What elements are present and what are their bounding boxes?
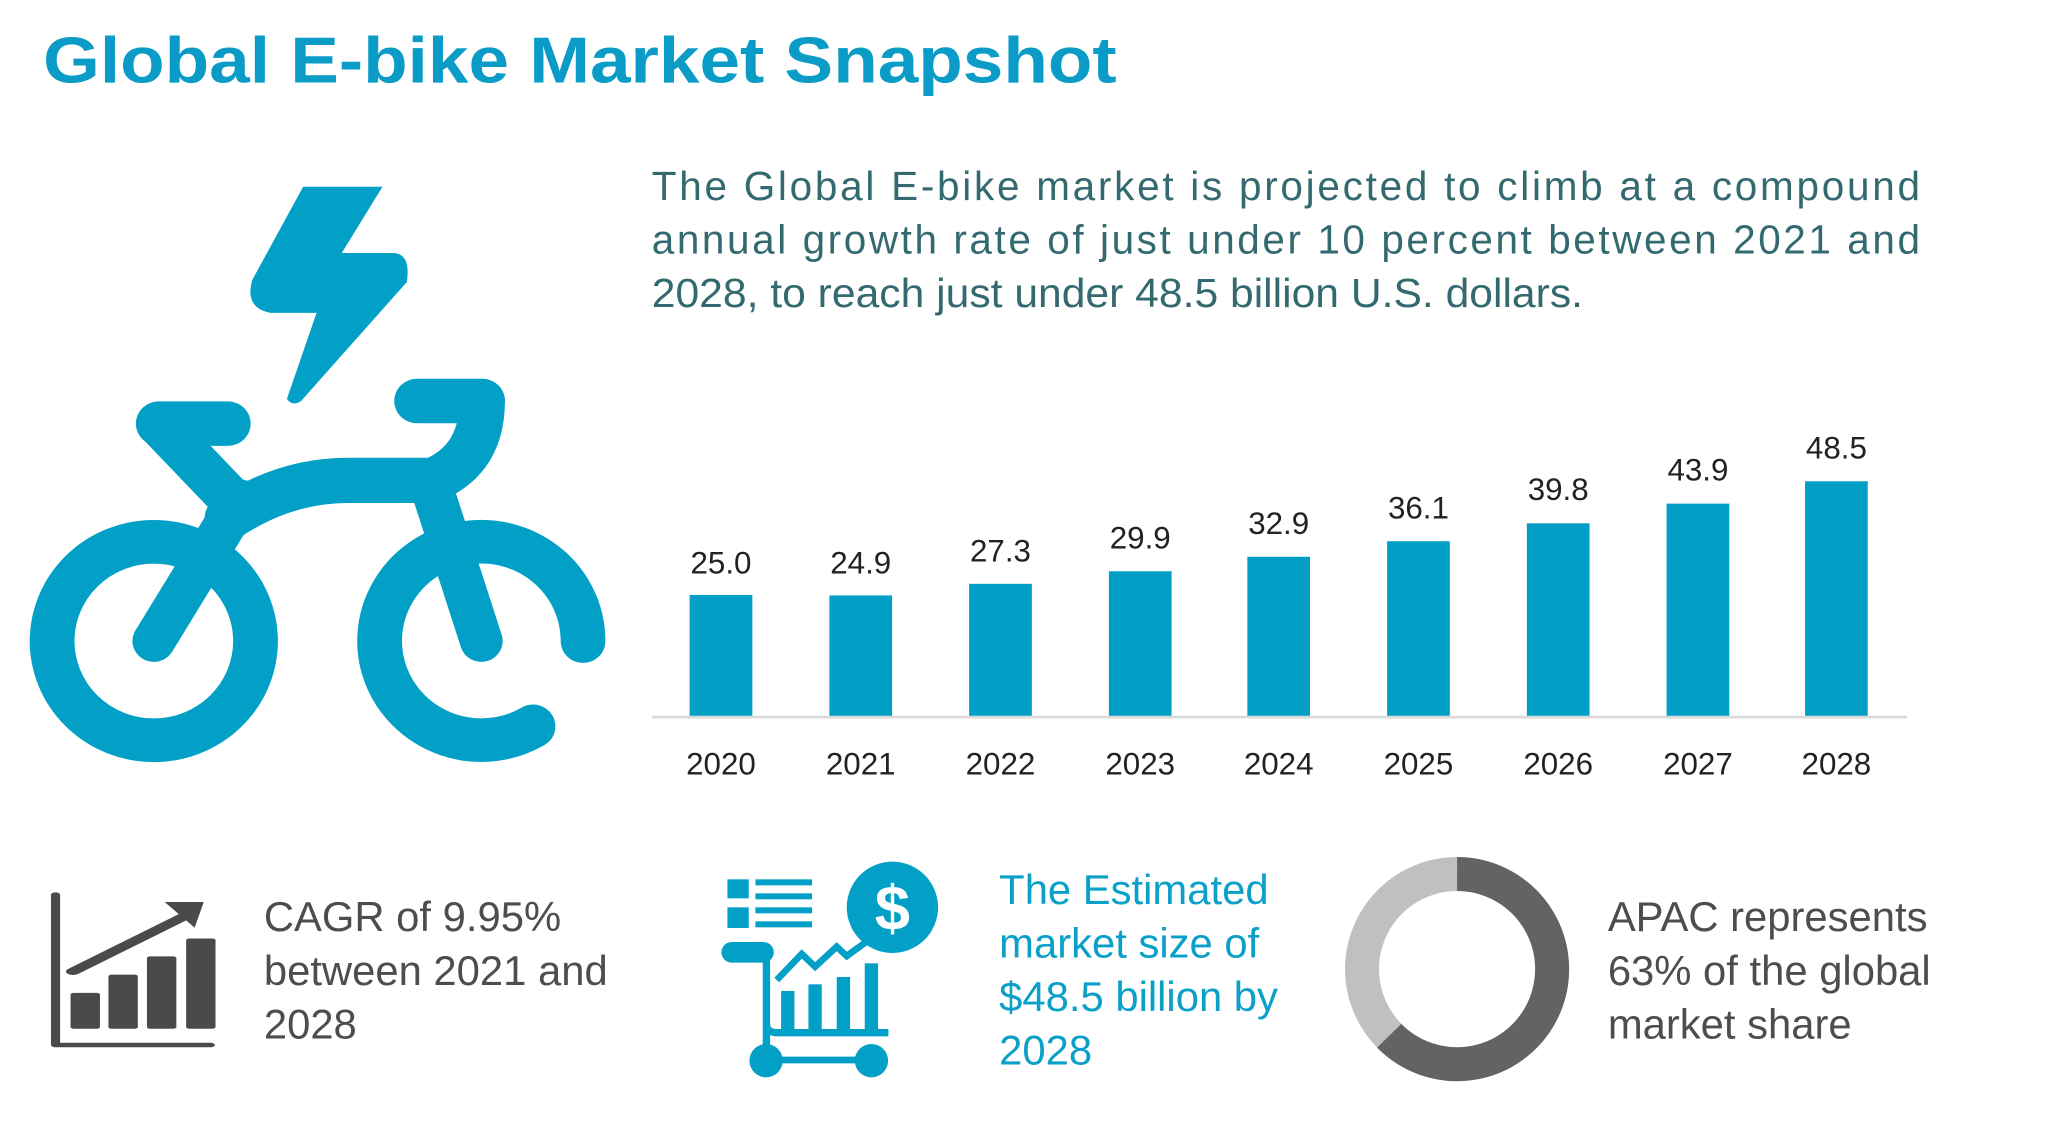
text: estimated market size: The Estimated (999, 866, 1269, 913)
bar chart: 2022 (966, 747, 1035, 782)
text: estimated market size: 2028 (999, 1026, 1092, 1073)
intro paragraph: annual growth rate of just under 10 percent between 2021 and (652, 216, 1920, 262)
bar chart: 2028 (1802, 747, 1871, 782)
icon: electric bike (52, 187, 583, 740)
bar chart: 2026 (1523, 747, 1593, 782)
bar chart: 2024 (1244, 747, 1314, 782)
bar chart: 29.9 (1110, 521, 1171, 556)
text: CAGR: 2028 (264, 1000, 357, 1047)
text: CAGR (264, 893, 608, 1047)
intro paragraph: The Global E-bike market is projected to climb at a compound (652, 163, 1920, 209)
intro paragraph (652, 163, 1920, 316)
text: APAC: APAC represents (1608, 893, 1928, 940)
bar chart: 48.5 (1806, 430, 1867, 465)
icon: shopping cart with dollar: $ (875, 874, 910, 944)
title: Global E-bike Market Snapshot (43, 23, 1117, 96)
icon: growth chart (56, 895, 216, 1045)
text: estimated market size: $48.5 billion by (999, 973, 1278, 1020)
bar chart: 2025 (1384, 747, 1453, 782)
text: CAGR: between 2021 and (264, 947, 608, 994)
bar chart: 2020 (686, 747, 756, 782)
intro paragraph: 2028, to reach just under 48.5 billion U.S. dollars. (652, 270, 1583, 316)
text: estimated market size: market size of (999, 919, 1260, 966)
donut chart: APAC share (1362, 874, 1552, 1064)
text: estimated market size (999, 866, 1278, 1073)
bar chart: 2027 (1663, 747, 1733, 782)
icon: shopping cart with dollar (727, 862, 938, 1077)
bar chart: 25.0 (690, 545, 751, 580)
bar chart: 24.9 (830, 545, 891, 580)
bar chart: 27.3 (970, 534, 1031, 569)
bar chart: 43.9 (1667, 453, 1728, 488)
bar chart (652, 430, 1907, 782)
text: CAGR: CAGR of 9.95% (264, 893, 561, 940)
bar chart: 36.1 (1388, 491, 1449, 526)
text: APAC: market share (1608, 1000, 1852, 1047)
text: APAC: 63% of the global (1608, 947, 1931, 994)
bar chart: 2021 (826, 747, 896, 782)
text: APAC (1608, 893, 1931, 1047)
bar chart: 2023 (1105, 747, 1175, 782)
bar chart: 39.8 (1528, 472, 1589, 507)
bar chart: 32.9 (1248, 506, 1309, 541)
